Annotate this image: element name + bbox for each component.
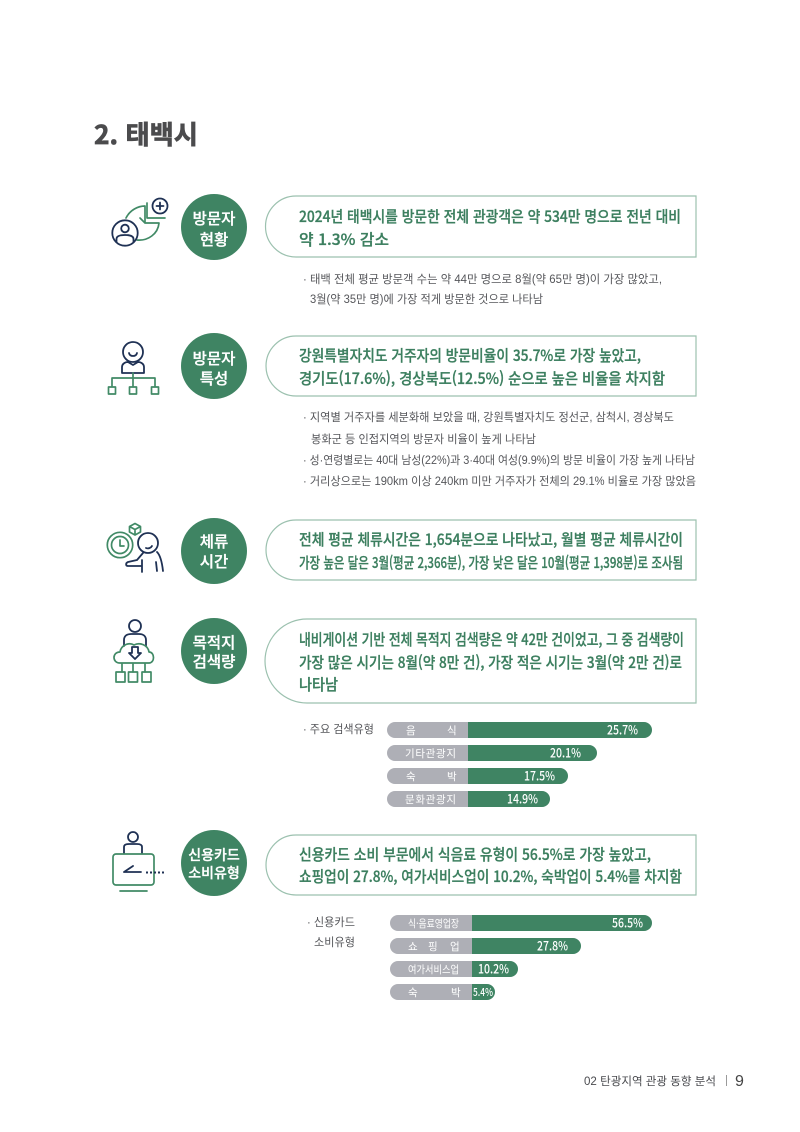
- badge: visitor status: 현황: [200, 228, 228, 250]
- callout: length of stay: 전체 평균 체류시간은 1,654분으로 나타났고, 월별 평균 체류시간이: [299, 528, 683, 550]
- callout: destination search volume: [265, 619, 696, 703]
- badge: credit card spending: 소비유형: [188, 863, 240, 883]
- callout: destination search volume: 가장 많은 시기는 8월(약 8만 건), 가장 적은 시기는 3월(약 2만 건)로: [299, 651, 682, 673]
- panel: visitor status: [112, 194, 696, 306]
- chart label: · 신용카드: [307, 916, 355, 929]
- title: 2. 태백시: [94, 115, 198, 152]
- panel: visitor characteristics: [108, 333, 696, 488]
- chart label: [307, 916, 355, 949]
- callout: length of stay: [266, 520, 696, 580]
- badge: visitor status: 방문자: [193, 207, 235, 229]
- text block: visitor status details: · 태백 전체 평균 방문객 수는 약 44만 명으로 8월(약 65만 명)이 가장 많았고,: [303, 272, 662, 286]
- callout: visitor characteristics: 경기도(17.6%), 경상북도(12.5%) 순으로 높은 비율을 차지함: [299, 367, 665, 389]
- bar: food: 음: [406, 723, 416, 738]
- badge: credit card spending: 신용카드: [188, 845, 240, 865]
- badge: visitor characteristics: 방문자: [193, 347, 235, 369]
- bar: lodging: [390, 984, 495, 1000]
- text block: visitor characteristics details: · 거리상으로는 190km 이상 240km 미만 거주자가 전체의 29.1% 비율로 가장 많았음: [303, 475, 696, 488]
- badge: visitor status: [181, 194, 247, 260]
- callout: visitor characteristics: 강원특별자치도 거주자의 방문비율이 35.7%로 가장 높았고,: [299, 344, 641, 366]
- callout: visitor status: 약 1.3% 감소: [299, 228, 389, 250]
- callout: visitor status: 2024년 태백시를 방문한 전체 관광객은 약 534만 명으로 전년 대비: [299, 205, 681, 227]
- bar: lodging: 5.4%: [473, 984, 493, 1000]
- chart: credit card spending types: [307, 912, 652, 1000]
- bar: leisure services: [390, 958, 518, 978]
- badge: visitor characteristics: [181, 333, 247, 399]
- panel: credit card spending: [113, 830, 696, 1000]
- callout: destination search volume: 나타남: [299, 673, 338, 695]
- bar: cultural tourism: 14.9%: [507, 788, 538, 808]
- text block: visitor characteristics details: [303, 410, 696, 488]
- bar: food: 식: [447, 723, 457, 738]
- bar: lodging: 숙: [408, 985, 418, 1000]
- bar: food: [387, 720, 652, 738]
- badge: destination search volume: 목적지: [193, 631, 235, 653]
- badge: destination search volume: 검색량: [193, 650, 235, 672]
- footer: section name and page number: 9: [735, 1073, 744, 1090]
- text block: visitor status details: [303, 272, 662, 306]
- icon: person with org chart: [108, 342, 158, 394]
- bar: other tourist sites: [387, 742, 597, 762]
- bar: lodging: [387, 766, 568, 784]
- badge: length of stay: [181, 518, 247, 584]
- callout: length of stay: 가장 높은 달은 3월(평균 2,366분), 가장 낮은 달은 10월(평균 1,398분)로 조사됨: [299, 552, 683, 573]
- bar: food and beverage: 56.5%: [612, 912, 643, 932]
- bar: shopping: 27.8%: [537, 936, 568, 954]
- bar: lodging: 박: [451, 985, 461, 1000]
- footer: section name and page number: [584, 1073, 744, 1090]
- bar: food: 25.7%: [607, 720, 638, 738]
- panel: length of stay: [107, 518, 696, 584]
- bar: food and beverage: [390, 912, 652, 932]
- bar: shopping: 핑: [428, 939, 438, 954]
- badge: destination search volume: [181, 618, 247, 684]
- chart label: · 주요 검색유형: [303, 723, 374, 736]
- text block: visitor characteristics details: · 지역별 거주자를 세분화해 보았을 때, 강원특별자치도 정선군, 삼척시, 경상북도: [303, 410, 674, 424]
- icon: person with screen: [113, 832, 164, 891]
- bar: leisure services: 10.2%: [478, 958, 509, 978]
- icon: person with cloud download: [114, 620, 154, 682]
- icon: visitor with plus: [112, 198, 168, 246]
- bar: cultural tourism: [387, 788, 550, 808]
- panel: destination search volume: [114, 618, 696, 808]
- icon: person with clock and cube: [107, 524, 163, 572]
- bar: lodging: 17.5%: [524, 766, 555, 784]
- badge: visitor characteristics: 특성: [200, 367, 228, 389]
- badge: length of stay: 체류: [200, 530, 228, 552]
- bar: shopping: [390, 936, 581, 954]
- text block: visitor characteristics details: 봉화군 등 인접지역의 방문자 비율이 높게 나타남: [311, 433, 536, 446]
- badge: length of stay: 시간: [200, 550, 228, 572]
- bar: leisure services: 여가서비스업: [408, 962, 459, 977]
- bar: shopping: 쇼: [408, 939, 418, 954]
- callout: visitor characteristics: [266, 336, 696, 396]
- callout: credit card spending: 신용카드 소비 부문에서 식음료 유형이 56.5%로 가장 높았고,: [299, 843, 651, 865]
- badge: credit card spending: [181, 830, 247, 896]
- chart: main search types: [303, 720, 652, 808]
- bar: food and beverage: 식·음료영업장: [408, 916, 459, 931]
- bar: other tourist sites: 기타관광지: [405, 746, 456, 761]
- bar: other tourist sites: 20.1%: [550, 742, 581, 762]
- callout: credit card spending: 쇼핑업이 27.8%, 여가서비스업이 10.2%, 숙박업이 5.4%를 차지함: [299, 865, 682, 887]
- callout: visitor status: [266, 196, 696, 257]
- bar: lodging: 숙: [406, 769, 416, 784]
- text block: visitor status details: 3월(약 35만 명)에 가장 적게 방문한 것으로 나타남: [310, 292, 543, 306]
- chart label: 소비유형: [314, 936, 355, 949]
- callout: destination search volume: 내비게이션 기반 전체 목적지 검색량은 약 42만 건이었고, 그 중 검색량이: [299, 628, 684, 650]
- text block: visitor characteristics details: · 성·연령별로는 40대 남성(22%)과 3·40대 여성(9.9%)의 방문 비율이 가장 높게 나타남: [303, 454, 695, 467]
- bar: lodging: 박: [447, 769, 457, 784]
- bar: cultural tourism: 문화관광지: [405, 792, 456, 807]
- bar: shopping: 업: [450, 939, 460, 954]
- callout: credit card spending: [266, 835, 696, 895]
- footer: section name and page number: 02 탄광지역 관광 동향 분석: [584, 1075, 716, 1088]
